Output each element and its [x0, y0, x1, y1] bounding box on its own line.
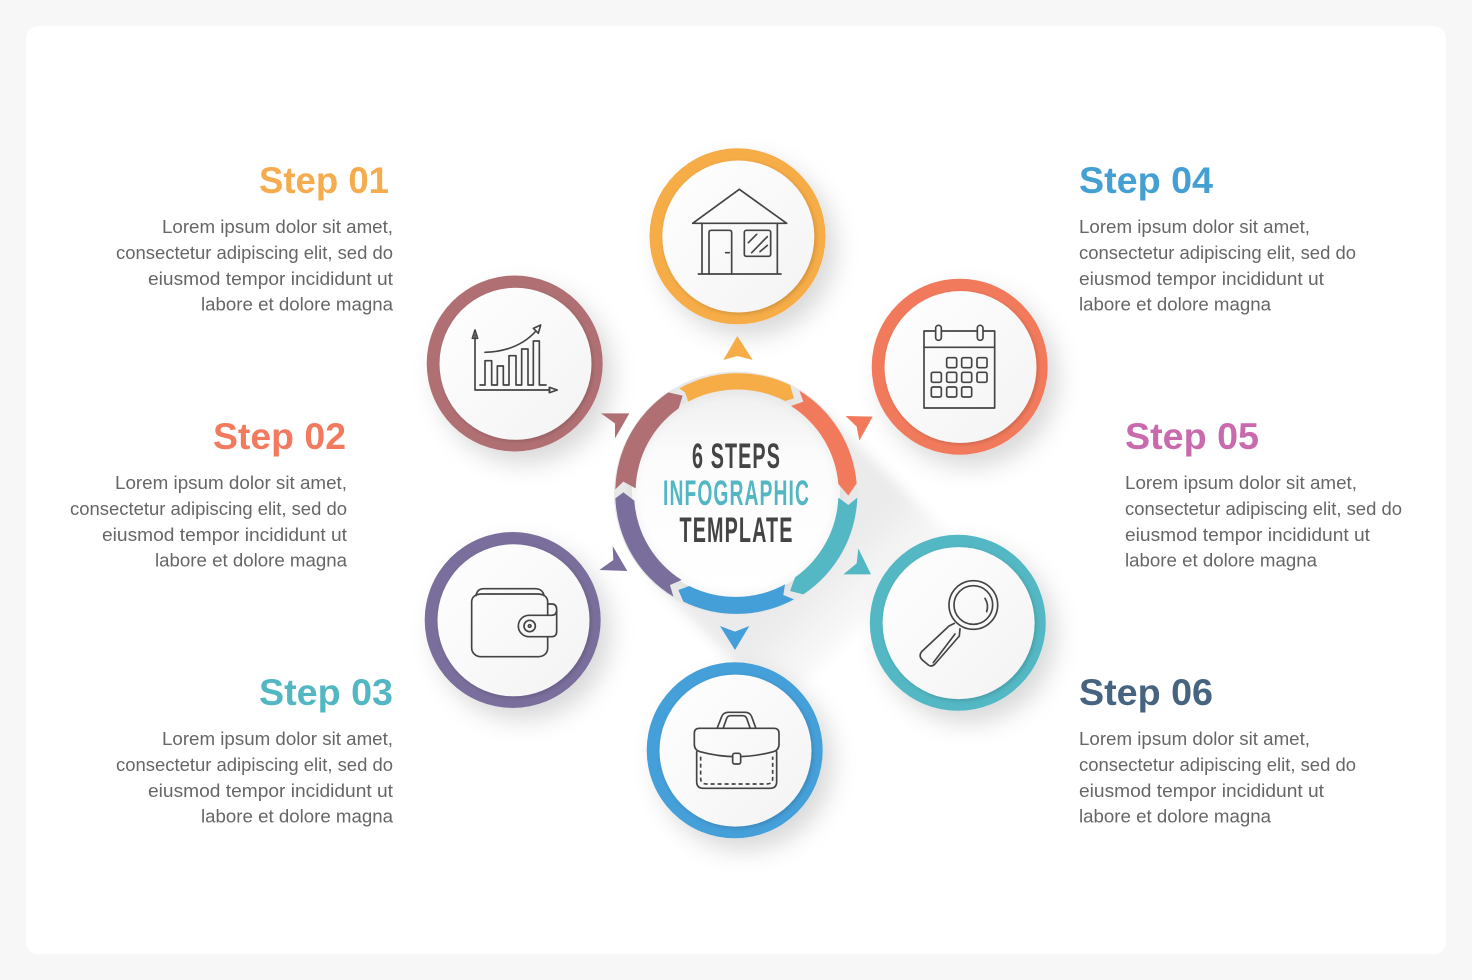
description: step 01: labore et dolore magna	[201, 294, 394, 314]
description: step 05: consectetur adipiscing elit, sed do	[1125, 498, 1402, 519]
description: step 05: labore et dolore magna	[1125, 550, 1318, 570]
description: step 04	[1079, 216, 1356, 314]
ring segment: blue	[678, 584, 794, 614]
arrow: blue	[720, 626, 749, 650]
ring segment: coral	[791, 391, 857, 496]
arrow: mauve	[601, 413, 629, 438]
text block: step 04	[1079, 160, 1356, 314]
description: step 04: labore et dolore magna	[1079, 294, 1272, 314]
description: step 06: labore et dolore magna	[1079, 806, 1272, 826]
icon: wallet	[472, 589, 557, 657]
text block: step 01	[116, 160, 394, 314]
long diagonal shadow of central ring	[650, 408, 950, 707]
description: step 05: Lorem ipsum dolor sit amet,	[1125, 472, 1357, 493]
heading: step 04: Step 04	[1079, 160, 1213, 201]
description: step 02: labore et dolore magna	[155, 550, 348, 570]
ring segments	[615, 373, 857, 614]
description: step 01: consectetur adipiscing elit, sed do	[116, 242, 393, 263]
heading: step 06: Step 06	[1079, 672, 1213, 713]
circle: magnifier (teal)	[870, 535, 1046, 711]
arrow: teal	[843, 548, 871, 574]
description: step 05	[1125, 472, 1402, 570]
description: step 04: consectetur adipiscing elit, sed do	[1079, 242, 1356, 263]
description: step 03	[116, 728, 394, 826]
description: step 05: eiusmod tempor incididunt ut	[1125, 524, 1370, 545]
description: step 02	[70, 472, 348, 570]
description: step 06	[1079, 728, 1356, 826]
center title: TEMPLATE	[680, 511, 794, 550]
circle: chart (mauve)	[427, 276, 603, 452]
heading: step 05: Step 05	[1125, 416, 1259, 457]
heading: step 01: Step 01	[259, 160, 389, 201]
description: step 06: eiusmod tempor incididunt ut	[1079, 780, 1324, 801]
central ring diagram	[614, 372, 858, 616]
description: step 02: eiusmod tempor incididunt ut	[102, 524, 347, 545]
center title: 6 STEPS	[692, 437, 781, 476]
heading: step 02: Step 02	[213, 416, 346, 457]
center title	[663, 437, 810, 550]
ring segment: mauve	[615, 392, 683, 489]
icon: growth chart	[472, 325, 557, 393]
arrow markers	[599, 336, 873, 650]
icon: briefcase	[694, 712, 779, 788]
description: step 01: Lorem ipsum dolor sit amet,	[162, 216, 393, 237]
circle: briefcase (blue)	[647, 662, 823, 838]
icon: magnifying glass	[920, 581, 998, 666]
description: step 02: consectetur adipiscing elit, sed do	[70, 498, 347, 519]
text block: step 02	[70, 416, 348, 570]
arrow: orange	[723, 336, 753, 360]
description: step 03: eiusmod tempor incididunt ut	[148, 780, 393, 801]
ring segment: teal	[790, 498, 857, 594]
description: step 01: eiusmod tempor incididunt ut	[148, 268, 393, 289]
text block: step 03	[116, 672, 394, 826]
description: step 03: labore et dolore magna	[201, 806, 394, 826]
description: step 03: Lorem ipsum dolor sit amet,	[162, 728, 393, 749]
description: step 01	[116, 216, 394, 314]
heading: step 03: Step 03	[259, 672, 393, 713]
ring segment: purple	[615, 492, 682, 597]
circle: wallet (purple)	[425, 532, 601, 708]
description: step 06: Lorem ipsum dolor sit amet,	[1079, 728, 1310, 749]
arrow: coral	[846, 416, 873, 441]
description: step 02: Lorem ipsum dolor sit amet,	[115, 472, 347, 493]
icon: calendar	[924, 325, 995, 408]
description: step 04: Lorem ipsum dolor sit amet,	[1079, 216, 1310, 237]
ring segment: orange	[679, 373, 794, 402]
description: step 03: consectetur adipiscing elit, sed do	[116, 754, 393, 775]
circle: calendar (coral)	[872, 279, 1048, 455]
center title: INFOGRAPHIC	[663, 474, 810, 513]
icon: house	[693, 189, 787, 274]
description: step 06: consectetur adipiscing elit, sed do	[1079, 754, 1356, 775]
arrow: purple	[599, 546, 627, 571]
text block: step 05	[1125, 416, 1402, 570]
circle: house (orange)	[650, 148, 826, 324]
text block: step 06	[1079, 672, 1356, 826]
description: step 04: eiusmod tempor incididunt ut	[1079, 268, 1324, 289]
